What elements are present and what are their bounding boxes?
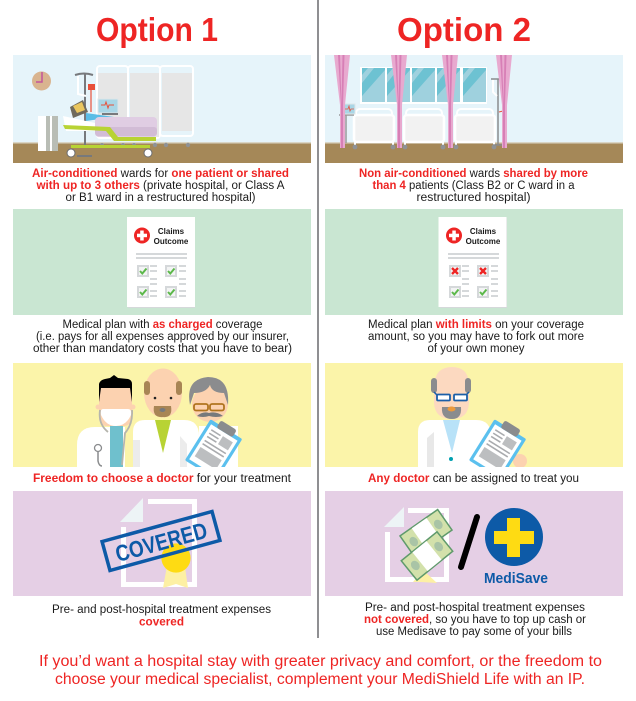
icon: IV drip stand	[75, 74, 95, 156]
text: coverage option 2: Medical plan with limits on your coverage	[368, 319, 584, 331]
icon: document outline	[120, 498, 194, 584]
icon: claims document: Outcome	[466, 237, 501, 246]
panel: claims outcome with limits	[325, 209, 623, 315]
divider between options	[317, 0, 319, 638]
title: Option 1: Option 1	[96, 11, 218, 48]
text: ward description option 1: Air-conditioned wards for one patient or shared	[32, 168, 289, 180]
icon: wall clock	[32, 72, 51, 90]
icon: curtains	[334, 55, 512, 148]
text: ward description option 1: with up to 3 others (private hospital, or Class A	[35, 180, 285, 192]
text: pre and post option 1: covered	[139, 616, 184, 628]
text: MediSave label: MediSave	[484, 570, 548, 587]
panel: any doctor	[325, 363, 623, 467]
text: coverage option 1: other than mandatory costs that you have to bear)	[33, 343, 292, 355]
text: coverage option 1: (i.e. pays for all expenses approved by our insurer,	[36, 331, 289, 343]
icon: claims document: Claims	[158, 227, 185, 236]
panel: covered	[13, 491, 311, 596]
icon: bald doctor	[133, 368, 199, 467]
text: ward description option 2: Non air-conditioned wards shared by more	[359, 168, 588, 180]
icon: claims document: Claims	[470, 227, 497, 236]
text: pre and post option 2: Pre- and post-hospital treatment expenses	[365, 602, 585, 614]
text: pre and post option 2: not covered, so you have to top up cash or	[364, 614, 586, 626]
text: coverage option 1: Medical plan with as charged coverage	[62, 319, 262, 331]
icon: doctor with clipboard	[418, 367, 527, 467]
text: ward description option 1: or B1 ward in a restructured hospital)	[66, 192, 256, 204]
icon: heart monitor	[98, 99, 118, 115]
icon: medisave cross	[485, 508, 543, 566]
icon: doctor with glasses	[189, 377, 238, 467]
title: Option 2: Option 2	[397, 11, 531, 48]
icon: slash	[461, 517, 477, 567]
text: coverage option 1	[33, 319, 292, 355]
icon: folding screen	[97, 66, 193, 147]
icon: document and cash	[384, 507, 453, 583]
icon: claims document	[127, 217, 195, 308]
closing message: If you’d want a hospital stay with greater privacy and comfort, or the freedom to	[39, 653, 602, 670]
icon: clipboard	[185, 420, 242, 467]
icon: window cabinet	[38, 116, 58, 151]
panel: not covered	[325, 491, 623, 596]
icon: doctor with mask	[77, 375, 136, 467]
text: ward description option 2: restructured hospital)	[416, 192, 531, 204]
panel: non air-conditioned ward	[325, 55, 623, 163]
text: any doctor: Any doctor can be assigned to treat you	[368, 473, 579, 485]
panel: air-conditioned ward	[13, 55, 311, 163]
text: doctor choice: Freedom to choose a doctor for your treatment	[33, 473, 292, 485]
icon: heart monitor	[339, 104, 355, 143]
icon: windows	[360, 67, 487, 104]
text: pre and post option 1	[52, 604, 271, 628]
panel: claims outcome as charged	[13, 209, 311, 315]
icon: claims document: Outcome	[154, 237, 189, 246]
text: ward description option 2	[359, 168, 588, 204]
text: ward description option 1	[32, 168, 289, 204]
text: coverage option 2	[368, 319, 584, 355]
text: coverage option 2: of your own money	[428, 343, 525, 355]
text: pre and post option 1: Pre- and post-hospital treatment expenses	[52, 604, 271, 616]
icon: patient in bed	[63, 100, 157, 157]
closing message	[39, 653, 602, 688]
icon: covered stamp: COVERED	[112, 517, 210, 567]
text: ward description option 2: than 4 patients (Class B2 or C ward in a	[372, 180, 575, 192]
icon: claims document	[438, 217, 507, 308]
icon: hospital beds	[353, 109, 496, 149]
icon: IV drip stand	[491, 79, 503, 145]
text: pre and post option 2: use Medisave to pay some of your bills	[376, 626, 572, 638]
panel: three doctors	[13, 363, 311, 467]
closing message: choose your medical specialist, complement your MediShield Life with an IP.	[55, 671, 585, 688]
icon: gold seal	[161, 543, 191, 588]
text: coverage option 2: amount, so you may have to fork out more	[368, 331, 584, 343]
text: pre and post option 2	[364, 602, 586, 638]
